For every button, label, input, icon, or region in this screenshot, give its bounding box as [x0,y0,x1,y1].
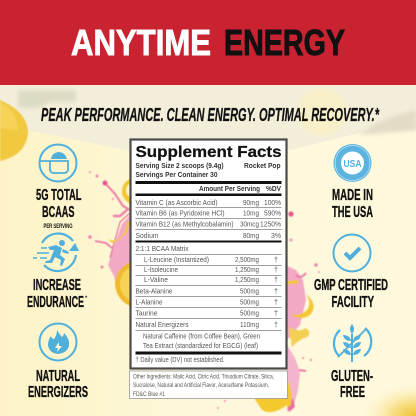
header band [0,0,416,85]
nutrient rows: † [274,298,278,306]
lemon slice left [0,100,28,161]
nutrient rows: Natural Caffeine (from Coffee Bean), Green [143,332,260,340]
serving info [136,161,281,179]
feature: gmp certified [314,234,388,311]
other ingredients: FD&C Blue #1 [133,392,166,398]
title: ANYTIME [71,22,211,63]
nutrient rows: Tea Extract (standardized for EGCG) (leaf) [143,341,258,350]
icon: scoop [40,144,76,182]
feature: gluten free: FREE [340,384,365,401]
feature: natural energizers: NATURAL [36,368,80,385]
nutrient rows: 90mg [243,198,259,207]
feature: natural energizers: ENERGIZERS [28,384,88,401]
other ingredients [130,371,288,398]
nutrient rows: 1,250mg [235,275,259,284]
serving info: Servings Per Container 30 [136,170,218,179]
feature: gluten free [331,324,373,401]
nutrient rows: Beta-Alanine [136,286,173,296]
pink splash left [88,171,130,306]
column header: Amount Per Serving [199,184,260,193]
footnote: † Daily value (DV) not established. [136,355,224,364]
nutrient rows: L-Alanine [136,298,162,306]
nutrient rows: † [274,320,278,329]
nutrient rows: Sodium [136,231,159,240]
serving info: Serving Size 2 scoops (9.4g) [136,161,224,170]
nutrient rows: 1,250mg [235,265,259,274]
nutrient rows: 2:1:1 BCAA Matrix [136,244,189,253]
nutrient rows: 100% [264,198,282,207]
nutrient rows: 500mg [240,308,259,318]
nutrient rows: L-Isoleucine [144,265,178,274]
nutrient rows: 2,500mg [235,255,259,264]
heading: Supplement Facts [136,144,282,161]
nutrient rows: 10mg [243,208,259,218]
nutrient rows: 80mg [243,231,259,240]
icon: flame [40,324,76,360]
feature: 5g bcaas: PER SERVING [44,224,73,230]
feature: natural energizers [28,324,88,401]
icon: wheat [334,324,371,362]
panel: supplement facts [130,140,286,368]
nutrient rows: Natural Energizers [136,320,189,329]
serving info: Rocket Pop [244,161,281,170]
feature: made in usa: THE USA [332,204,373,221]
nutrient rows: 30mcg [240,220,259,228]
nutrient rows: † [274,275,278,284]
feature: 5g bcaas: BCAAS [42,204,75,221]
nutrient rows: † [274,265,278,274]
feature: made in usa [332,144,373,221]
feature: made in usa: MADE IN [332,187,373,204]
nutrient rows: † [274,308,278,318]
nutrient rows [136,198,282,350]
icon: usa badge: USA [344,159,362,170]
nutrient rows: 3% [271,231,282,240]
feature: 5g bcaas [36,144,82,230]
title [71,22,345,63]
feature: gmp certified: FACILITY [332,294,374,311]
pink splash right [217,211,320,412]
nutrient rows: Vitamin B12 (as Methylcobalamin) [136,220,234,228]
nutrient rows: L-Valine [144,275,168,284]
nutrient rows: Taurine [136,308,158,318]
nutrient rows: Vitamin C (as Ascorbic Acid) [136,198,218,207]
feature: endurance: * [85,296,88,302]
nutrient rows: † [274,286,278,296]
feature: gluten free: GLUTEN- [331,368,373,385]
title: ENERGY [224,22,345,63]
nutrient rows: L-Leucine (Instantized) [144,255,209,264]
nutrient rows: Vitamin B6 (as Pyridoxine HCl) [136,208,224,218]
nutrient rows: 500mg [240,298,259,306]
column header: %DV [266,184,281,193]
other ingredients: Other Ingredients: Malic Acid, Citric Acid, Trisodium Citrate, Silica, [133,374,274,380]
icon: check circle [334,234,370,272]
feature: endurance: ENDURANCE [27,294,84,311]
nutrient rows: 1250% [260,220,282,228]
nutrient rows: 500mg [240,286,259,296]
feature: 5g bcaas: 5G TOTAL [36,187,82,204]
nutrient rows: † [274,255,278,264]
feature: endurance [27,234,88,311]
feature: endurance: INCREASE [33,277,81,294]
nutrient rows: 110mg [240,320,259,329]
background [0,85,416,416]
other ingredients: Sucralose, Natural and Artificial Flavor, Acesulfame Potassium, [133,383,269,389]
nutrient rows: 590% [264,208,282,218]
icon: runner [33,234,79,271]
